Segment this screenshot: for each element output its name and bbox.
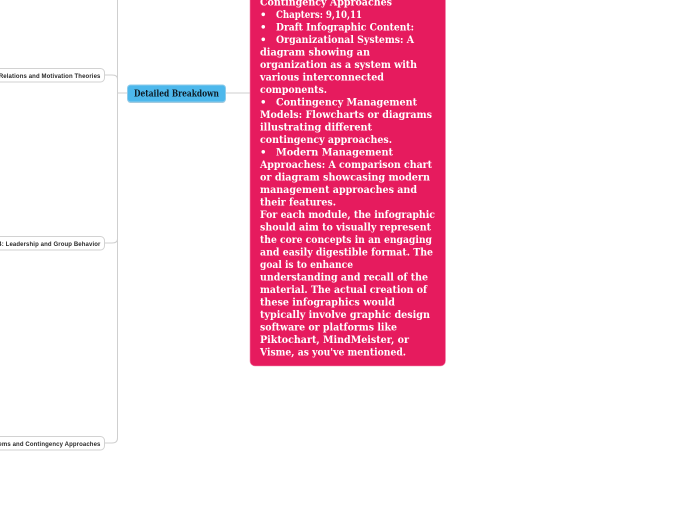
text block: panel body: contingency approaches. — [260, 134, 392, 146]
text block: panel body: • — [260, 9, 267, 21]
text block: panel body: software or platforms like — [260, 322, 397, 334]
text block: panel body: illustrating different — [260, 122, 372, 134]
text block: panel body: Visme, as you've mentioned. — [259, 346, 406, 358]
text block: panel body: components. — [260, 84, 327, 96]
text block: panel body: • — [260, 22, 267, 34]
text block: panel body: should aim to visually represent — [260, 222, 431, 234]
text block: panel body: • — [260, 96, 267, 108]
text block: panel body — [259, 0, 435, 358]
text block: panel body: For each module, the infographic — [260, 209, 435, 221]
text block: panel body: and easily digestible format. The — [260, 246, 433, 258]
text block: panel body: • — [260, 146, 267, 158]
text block: panel body: goal is to enhance — [260, 259, 353, 271]
text block: panel body: or diagram showcasing modern — [260, 172, 431, 184]
text block: panel body: understanding and recall of the — [260, 272, 428, 284]
node: Systems and Contingency Approaches — [0, 436, 104, 450]
text block: panel body: Chapters: 9,10,11 — [276, 9, 362, 21]
text block: panel body: Draft Infographic Content: — [276, 22, 414, 34]
text block: panel body: management approaches and — [260, 184, 417, 196]
text block: panel body: their features. — [260, 196, 336, 208]
text block: panel body: • — [260, 34, 267, 46]
node: Relations and Motivation Theories — [0, 68, 104, 82]
text block: panel body: Organizational Systems: A — [276, 34, 415, 46]
connector: main branch spine — [105, 0, 250, 443]
text block: panel body: various interconnected — [259, 72, 384, 84]
text block: panel body: diagram showing an — [260, 46, 371, 58]
text block: panel body: Models: Flowcharts or diagrams — [260, 109, 432, 121]
node: Detailed Breakdown: Detailed Breakdown — [134, 90, 219, 100]
text block: panel body: typically involve graphic design — [260, 309, 431, 321]
node: Detailed Breakdown — [128, 85, 226, 103]
text block: panel body: Piktochart, MindMeister, or — [260, 334, 410, 346]
text block: panel body: material. The actual creation of — [260, 284, 428, 296]
text block: panel body: these infographics would — [260, 296, 395, 308]
panel: infographic details — [250, 0, 446, 366]
node: Leadership and Group Behavior — [0, 236, 104, 250]
text block: panel body: the core concepts in an engaging — [260, 234, 432, 246]
text block: panel body: Modern Management — [276, 146, 393, 158]
text block: panel body: Contingency Management — [276, 96, 417, 108]
text block: panel body: Approaches: A comparison chart — [259, 159, 432, 171]
text block: panel body: organization as a system with — [260, 59, 418, 71]
